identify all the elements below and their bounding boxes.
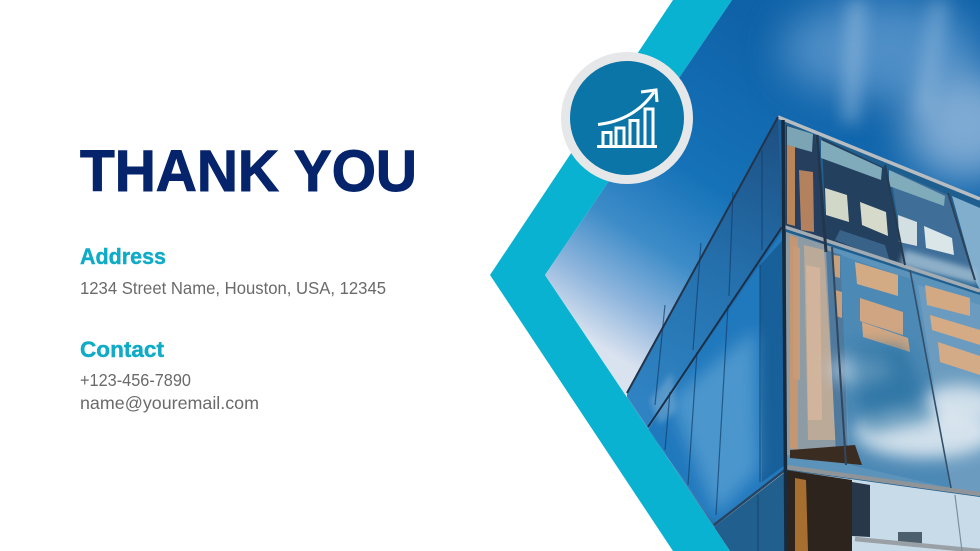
window panels [825,188,849,222]
phone number: +123-456-7890 [80,370,191,390]
chart badge [561,52,693,184]
sky clouds [780,0,980,180]
badge disc [570,61,684,175]
address heading: Address [80,244,166,269]
building photo [540,0,980,551]
email address: name@youremail.com [80,393,259,413]
contact heading: Contact [80,337,165,362]
reflected clouds [855,406,980,458]
upper floor panes [786,125,826,245]
facade mullions [655,150,762,551]
building beams [627,117,980,551]
contact block [80,337,259,413]
badge ring [561,52,693,184]
title: THANK YOU [80,139,417,204]
left building facade [627,115,786,551]
right building facade [784,118,980,551]
ground floor [785,470,980,551]
lower floor panes [785,232,980,495]
teal chevron band [490,0,732,551]
address text: 1234 Street Name, Houston, USA, 12345 [80,278,386,298]
transom glass [787,126,813,152]
sky [540,0,980,551]
icon: growth chart [597,90,657,146]
address block [80,244,386,298]
orange interior columns [787,145,795,226]
reflected wood panels [855,262,898,296]
